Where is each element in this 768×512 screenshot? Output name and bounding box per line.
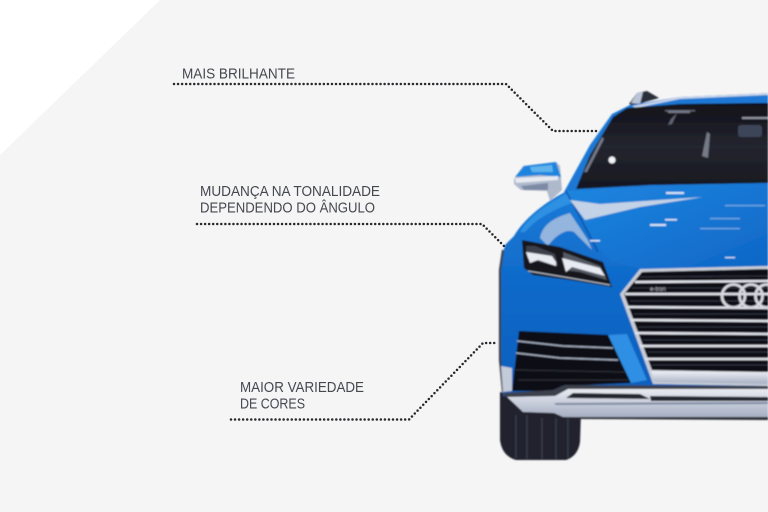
leader line: mudança na tonalidade [197,224,505,247]
hood specular flecks [590,192,765,258]
fender top light [520,194,572,232]
grille bottom chrome bar [651,371,768,384]
tyre [500,392,581,460]
side silver trim [501,366,512,392]
rack highlight [631,92,643,104]
roof highlight [632,93,768,108]
leader line: mais brilhante [174,84,597,131]
light blue bumper facet [608,334,647,383]
lower air intake [512,331,631,391]
e-tron badge: e-tron [650,287,666,293]
grille texture [630,276,768,365]
grille [620,266,768,386]
roof and pillars [564,93,768,195]
label: dependendo do ângulo: DEPENDENDO DO ÂNGULO [200,200,375,216]
hood [566,183,768,268]
label: de cores: DE CORES [240,396,305,412]
hood crease line [566,191,598,252]
fender reflection [540,213,592,250]
main body [500,192,768,396]
windshield [576,103,768,189]
front splitter [503,385,768,420]
four rings logo [722,284,768,308]
label: maior variedade: MAIOR VARIEDADE [240,379,364,396]
white corner triangle [0,0,160,155]
roof rack [629,91,659,106]
leader line: maior variedade [231,343,498,420]
wheel arch dark edge [500,250,503,392]
car illustration [500,91,768,460]
tyre tread [516,415,568,459]
mirror [514,162,562,201]
hood reflection [570,197,703,220]
headlight [522,240,612,287]
label: mudança na tonalidade: MUDANÇA NA TONALIDADE [200,183,380,200]
windshield reflections [584,110,768,172]
label: mais brilhante: MAIS BRILHANTE [182,66,295,82]
